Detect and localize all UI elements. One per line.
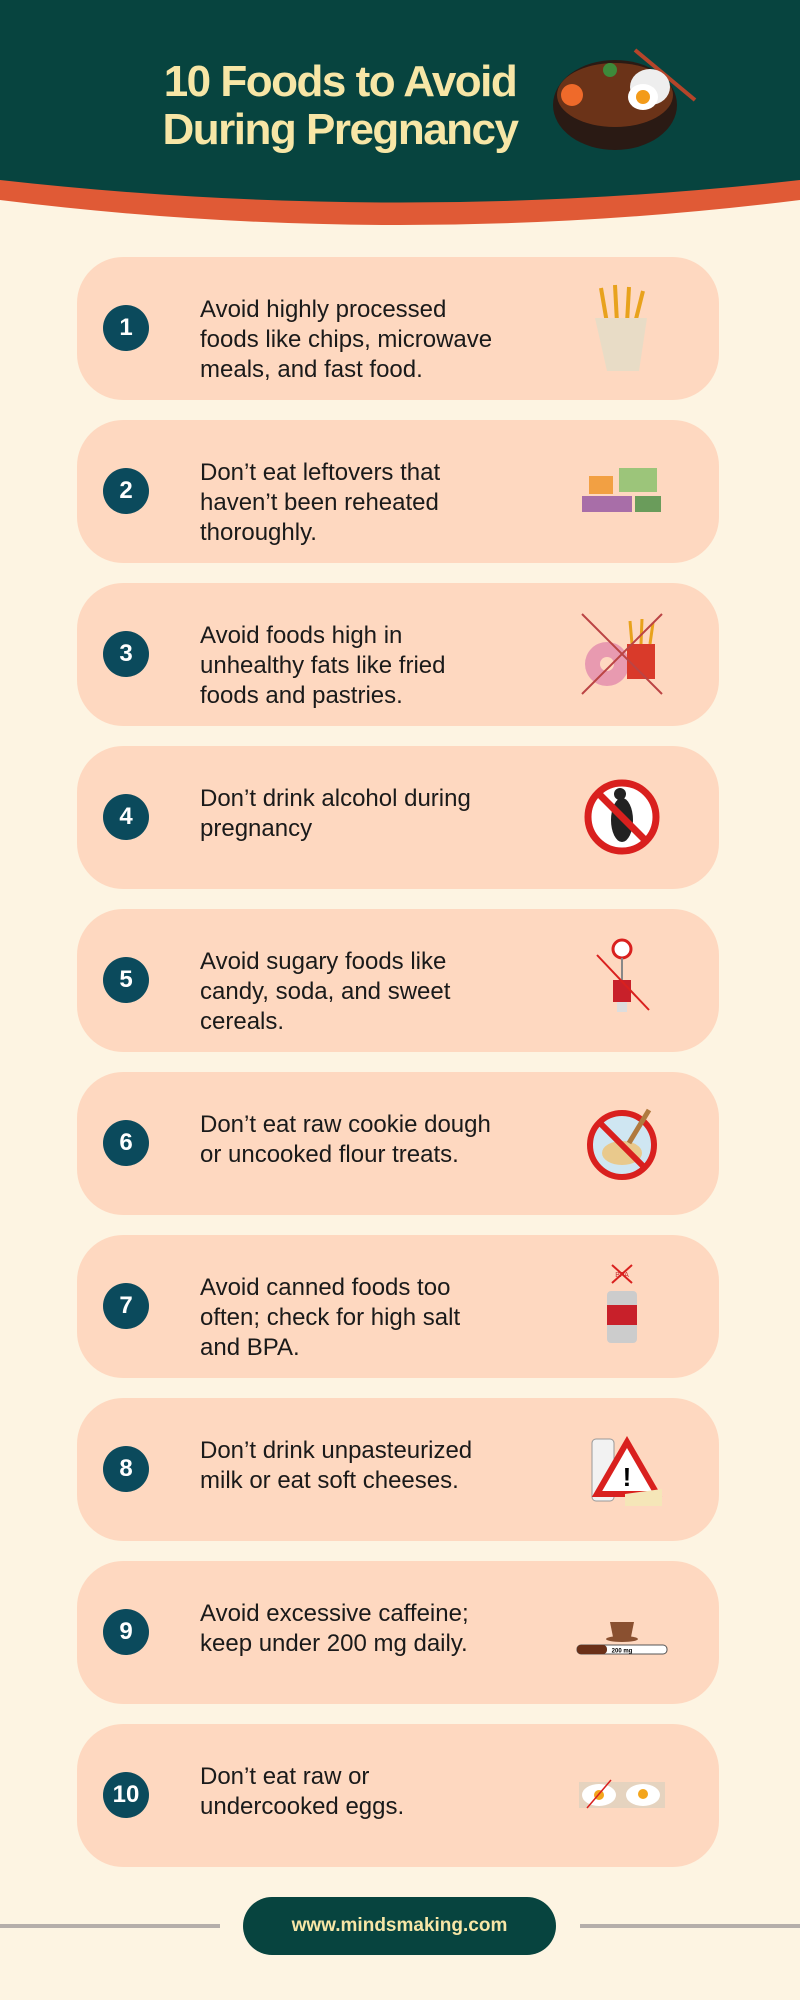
card 2: Don’t eat leftovers that [200, 459, 440, 486]
card 5: Avoid sugary foods like [200, 948, 446, 975]
card 10: 10 [113, 1781, 139, 1808]
card 1: meals, and fast food. [200, 356, 423, 383]
header background [0, 0, 800, 225]
card 5 [77, 909, 719, 1052]
icon: milk warning: ! [623, 1462, 631, 1492]
card 4: Don’t drink alcohol during [200, 785, 471, 812]
card 5: 5 [119, 966, 133, 993]
card 7 [77, 1235, 719, 1378]
card 4: 4 [119, 803, 133, 830]
card 2: thoroughly. [200, 519, 317, 546]
icon: containers [582, 468, 661, 512]
card 8: milk or eat soft cheeses. [200, 1467, 459, 1494]
card 9: keep under 200 mg daily. [200, 1630, 468, 1657]
card 5: candy, soda, and sweet [200, 978, 450, 1005]
card 8: 8 [119, 1455, 133, 1482]
footer line left [0, 1924, 220, 1928]
card 3: 3 [119, 640, 133, 667]
card 1: 1 [119, 314, 133, 341]
card 2 [77, 420, 719, 563]
icon: candy crossed [596, 938, 650, 1012]
card 4: pregnancy [200, 815, 312, 842]
card 8: Don’t drink unpasteurized [200, 1437, 472, 1464]
card 3: Avoid foods high in [200, 622, 402, 649]
card 6 [77, 1072, 719, 1215]
card 1: Avoid highly processed [200, 296, 446, 323]
icon: coffee with meter: 200 mg [612, 1648, 633, 1654]
card 10: Don’t eat raw or [200, 1763, 369, 1790]
title: During Pregnancy [163, 105, 517, 154]
card 1: foods like chips, microwave [200, 326, 492, 353]
card 5: cereals. [200, 1008, 284, 1035]
card 10 [77, 1724, 719, 1867]
card 7: 7 [119, 1292, 133, 1319]
card 4 [77, 746, 719, 889]
card 2: 2 [119, 477, 133, 504]
icon: can: BPA [615, 1272, 629, 1279]
footer url pill [243, 1897, 556, 1955]
icon: donut and fries crossed [581, 613, 663, 695]
title [163, 57, 519, 154]
card 8 [77, 1398, 719, 1541]
icon: milk warning [592, 1436, 662, 1506]
icon: coffee with meter [576, 1622, 668, 1654]
footer line right [580, 1924, 800, 1928]
card 6: 6 [119, 1129, 133, 1156]
icon: no cookie dough [587, 1108, 657, 1180]
icon: can [607, 1264, 637, 1343]
card 7: often; check for high salt [200, 1304, 460, 1331]
card 6: Don’t eat raw cookie dough [200, 1111, 491, 1138]
card 3: unhealthy fats like fried [200, 652, 445, 679]
icon: food bowl [553, 48, 696, 150]
card 2: haven’t been reheated [200, 489, 439, 516]
title: 10 Foods to Avoid [164, 57, 516, 106]
card 3: foods and pastries. [200, 682, 403, 709]
card 6: or uncooked flour treats. [200, 1141, 459, 1168]
card 1 [77, 257, 719, 400]
card 9 [77, 1561, 719, 1704]
icon: no alcohol pregnant [584, 780, 660, 854]
card 3 [77, 583, 719, 726]
footer url pill: www.mindsmaking.com [292, 1915, 507, 1936]
icon: eggs [579, 1780, 665, 1808]
card 10: undercooked eggs. [200, 1793, 404, 1820]
icon: fries [595, 284, 647, 371]
card 7: and BPA. [200, 1334, 300, 1361]
card 9: Avoid excessive caffeine; [200, 1600, 469, 1627]
card 9: 9 [119, 1618, 133, 1645]
card 7: Avoid canned foods too [200, 1274, 450, 1301]
